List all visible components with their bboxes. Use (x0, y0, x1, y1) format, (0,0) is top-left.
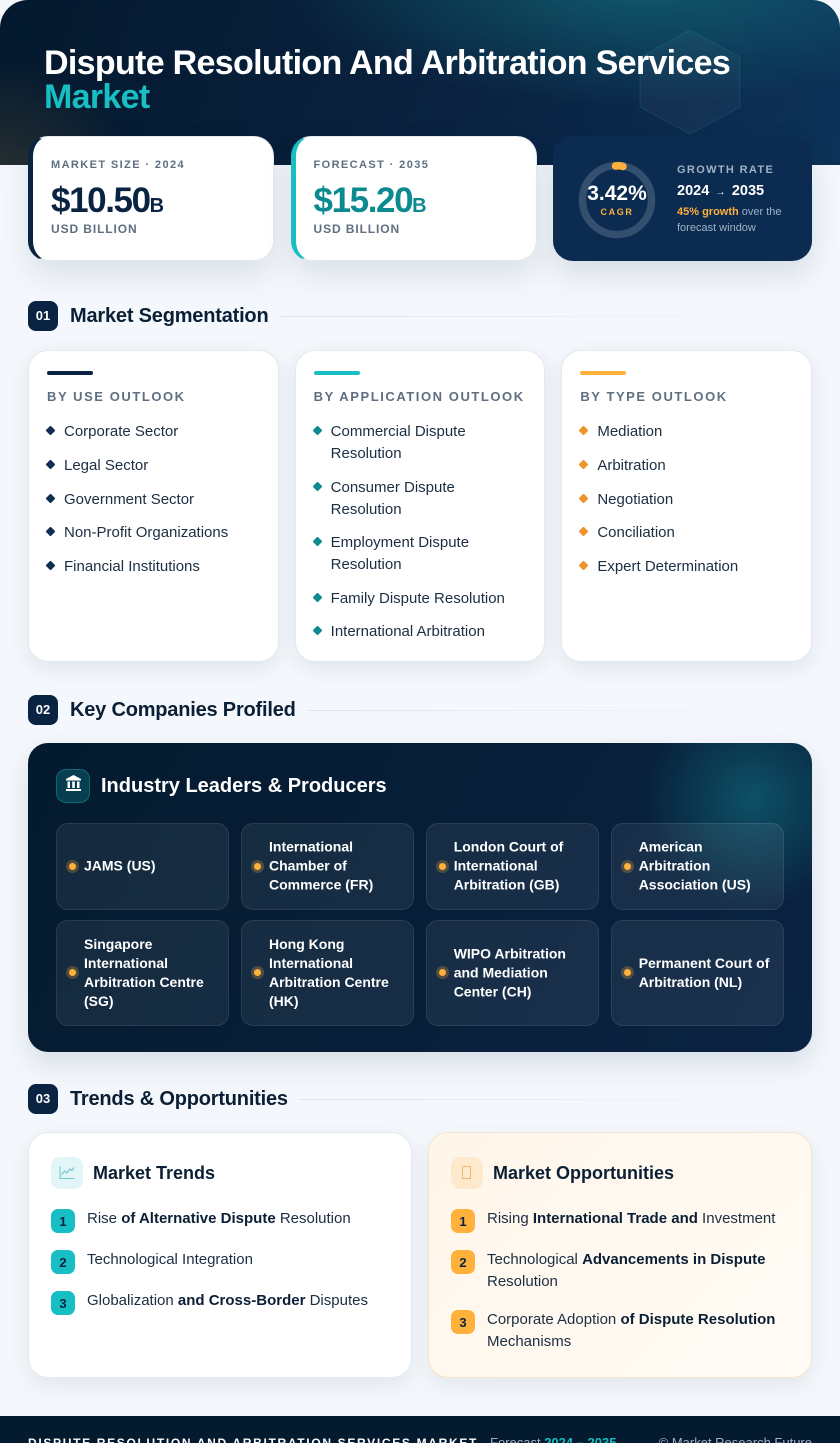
company: LCIA: Arbitration (GB) (454, 876, 559, 892)
panel: by use outlook: Corporate Sector (64, 423, 178, 440)
header band (0, 0, 840, 165)
panel: by application outlook: International Arbitration (331, 623, 485, 640)
trend 2 (51, 1250, 253, 1274)
panel: market opportunities: Rising International Trade and Investment (487, 1210, 775, 1227)
company: WIPO (426, 920, 599, 1026)
panel: industry leaders (28, 743, 812, 1052)
CAGR value: 3.42% (587, 182, 647, 205)
panel: by application outlook: Commercial Dispute (331, 423, 466, 440)
company: AAA: Arbitration (639, 858, 710, 874)
panel: market opportunities: Resolution (487, 1273, 558, 1290)
panel: market opportunities: Corporate Adoption of Dispute Resolution (487, 1311, 775, 1328)
company: SIAC: Arbitration Centre (84, 974, 204, 990)
icon: chart (51, 1157, 83, 1189)
growth rate card (553, 136, 812, 261)
panel: market opportunities: 1 (459, 1214, 467, 1229)
company: HKIAC (241, 920, 414, 1026)
company: AAA (611, 823, 784, 910)
stat card: market size: $10.50B (51, 181, 164, 220)
panel: by use outlook: Financial Institutions (64, 558, 200, 575)
growth note (677, 206, 782, 234)
opportunity 2 (451, 1250, 765, 1290)
panel: market trends: 3 (59, 1296, 67, 1311)
section heading 01: 01 (36, 308, 50, 323)
section heading 03: 03 (36, 1091, 50, 1106)
company: ICC: Commerce (FR) (269, 876, 373, 892)
company: SIAC: (SG) (84, 993, 114, 1009)
company: WIPO: WIPO Arbitration (454, 946, 566, 962)
company: AAA: Association (US) (639, 876, 751, 892)
panel: by type outlook: BY TYPE OUTLOOK (580, 389, 728, 404)
decorative hexagon (640, 30, 740, 134)
company: LCIA: London Court of (454, 838, 563, 854)
panel: market trends: Rise of Alternative Dispute Resolution (87, 1210, 351, 1227)
panel: by use outlook (28, 350, 279, 662)
panel: market trends: Globalization and Cross-Border Disputes (87, 1292, 368, 1309)
panel: market opportunities (428, 1132, 812, 1378)
heading: Market Trends (93, 1163, 215, 1183)
section heading 03 (28, 1084, 632, 1114)
panel: by type outlook: Conciliation (597, 524, 675, 541)
company: SIAC: Singapore (84, 936, 152, 952)
panel: by use outlook: Non-Profit Organizations (64, 524, 228, 541)
stat card: forecast: $15.20B (314, 181, 427, 220)
growth years: → (716, 187, 726, 198)
panel: by type outlook: Expert Determination (597, 558, 738, 575)
company: HKIAC: Hong Kong (269, 936, 344, 952)
panel: by application outlook: Resolution (331, 501, 402, 518)
panel: by application outlook: Consumer Dispute (331, 479, 455, 496)
growth label: GROWTH RATE (677, 164, 774, 176)
panel: by application outlook (295, 350, 545, 662)
heading: Market Opportunities (493, 1163, 674, 1183)
panel: market opportunities: 2 (459, 1255, 467, 1270)
section heading 02: 02 (36, 702, 50, 717)
section heading 02 (28, 695, 634, 725)
stat card: market size (28, 136, 274, 261)
panel heading: Industry Leaders & Producers (101, 775, 387, 797)
company: ICC (241, 823, 414, 910)
icon: missing glyph box (451, 1157, 483, 1189)
company: JAMS: JAMS (US) (84, 858, 156, 874)
stat card: forecast: FORECAST · 2035 (314, 159, 429, 171)
icon: institution (56, 769, 90, 803)
trend 1 (51, 1209, 351, 1233)
panel: market opportunities: Technological Advancements in Dispute (487, 1251, 765, 1268)
footer (0, 1416, 840, 1443)
company: PCA: Arbitration (NL) (639, 974, 742, 990)
section heading 02: Key Companies Profiled (70, 699, 296, 721)
section heading 01: Market Segmentation (70, 305, 268, 327)
panel: by application outlook: Employment Dispute (331, 534, 469, 551)
panel: by use outlook: BY USE OUTLOOK (47, 389, 186, 404)
growth years: 2024 2035 (677, 183, 764, 199)
company: LCIA: International (454, 858, 538, 874)
panel: market opportunities: 3 (459, 1315, 467, 1330)
company: AAA: American (639, 838, 702, 854)
panel: by application outlook: Family Dispute Resolution (331, 590, 505, 607)
stat card: forecast: USD BILLION (314, 222, 400, 236)
growth note: forecast window (677, 222, 756, 234)
section heading 03: Trends & Opportunities (70, 1088, 288, 1110)
stat card: forecast (290, 136, 536, 261)
company: ICC: International (269, 838, 353, 854)
panel: by application outlook: Resolution (331, 556, 402, 573)
company: HKIAC: Arbitration Centre (269, 974, 389, 990)
panel: market trends (28, 1132, 412, 1378)
panel: by type outlook: Mediation (597, 423, 662, 440)
company: HKIAC: (HK) (269, 993, 299, 1009)
panel: market opportunities: Mechanisms (487, 1333, 571, 1350)
panel: by type outlook: Negotiation (597, 491, 673, 508)
CAGR ring (578, 162, 656, 238)
title: Market (44, 78, 150, 116)
company: WIPO: Center (CH) (454, 984, 531, 1000)
company: PCA (611, 920, 784, 1026)
panel: by application outlook: Resolution (331, 445, 402, 462)
company: SIAC (56, 920, 229, 1026)
panel: by application outlook: BY APPLICATION OUTLOOK (314, 389, 525, 404)
opportunity 3 (451, 1310, 775, 1350)
panel: market trends: Technological Integration (87, 1251, 253, 1268)
panel: by use outlook: Legal Sector (64, 457, 148, 474)
growth note: 45% growth over the (677, 206, 782, 218)
panel: market trends: 1 (59, 1214, 67, 1229)
stat card: market size: USD BILLION (51, 222, 138, 236)
trend 3 (51, 1291, 368, 1315)
company: WIPO: and Mediation (454, 965, 548, 981)
panel: by type outlook (561, 350, 812, 662)
company: PCA: Permanent Court of (639, 955, 769, 971)
title: Dispute Resolution And Arbitration Services (44, 44, 730, 82)
opportunity 1 (451, 1209, 776, 1233)
company: SIAC: International (84, 955, 168, 971)
panel: by type outlook: Arbitration (597, 457, 666, 474)
company: HKIAC: International (269, 955, 353, 971)
panel: market trends: 2 (59, 1255, 67, 1270)
company: LCIA (426, 823, 599, 910)
section heading 01 (28, 301, 626, 331)
stat card: market size: MARKET SIZE · 2024 (51, 159, 185, 171)
panel: by use outlook: Government Sector (64, 491, 194, 508)
CAGR label: CAGR (601, 207, 633, 217)
company: ICC: Chamber of (269, 858, 347, 874)
company: JAMS (56, 823, 229, 910)
title (44, 44, 730, 116)
